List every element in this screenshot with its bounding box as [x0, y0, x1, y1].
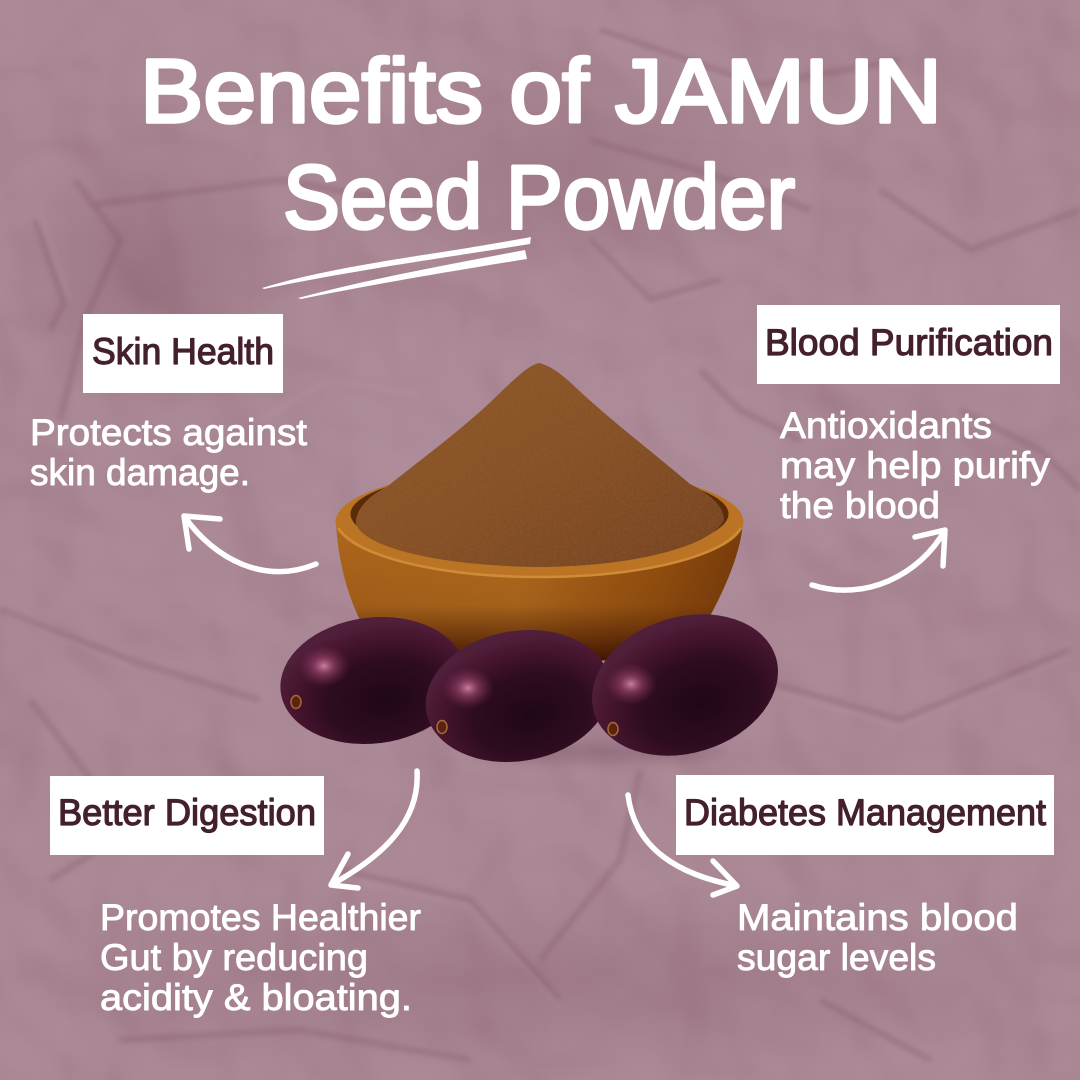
- fruit shadow: [470, 742, 730, 762]
- text: skin health description: Protects against: [30, 412, 308, 453]
- panel: skin health: [30, 314, 316, 572]
- label: blood purification: Blood Purification: [765, 322, 1053, 363]
- label: skin health: Skin Health: [92, 331, 274, 372]
- wooden bowl: [336, 467, 744, 662]
- text: blood purification description: [780, 405, 1051, 526]
- arrow: to diabetes management: [628, 795, 737, 895]
- powder mound: [356, 363, 724, 567]
- text: blood purification description: Antioxidants: [780, 405, 992, 446]
- jamun fruit right: [574, 592, 796, 778]
- label: better digestion: [50, 776, 324, 855]
- panel: better digestion: [50, 771, 421, 1018]
- text: better digestion description: [100, 897, 421, 1018]
- jamun fruit middle: [415, 616, 621, 776]
- text: blood purification description: the blood: [780, 485, 940, 526]
- label: diabetes management: [676, 775, 1054, 855]
- title: Benefits of JAMUN: [140, 42, 942, 142]
- panel: blood purification: [757, 305, 1060, 590]
- label: blood purification: [757, 305, 1060, 384]
- text: skin health description: skin damage.: [30, 452, 250, 493]
- text: skin health description: [30, 412, 308, 493]
- text: better digestion description: Promotes Healthier: [100, 897, 421, 938]
- text: better digestion description: Gut by reducing: [100, 937, 368, 978]
- text: diabetes management description: Maintains blood: [737, 897, 1018, 938]
- jamun fruit left: [273, 607, 473, 754]
- central illustration: bowl of powder and jamun fruits: [273, 363, 796, 778]
- title: Seed Powder: [283, 148, 795, 248]
- title: [140, 42, 942, 248]
- arrow: to skin health: [184, 516, 316, 572]
- arrow: to blood purification: [812, 530, 945, 590]
- label: skin health: [83, 314, 283, 393]
- text: better digestion description: acidity & bloating.: [100, 977, 412, 1018]
- arrow: to better digestion: [331, 771, 417, 888]
- label: better digestion: Better Digestion: [58, 792, 316, 833]
- panel: diabetes management: [628, 775, 1054, 978]
- text: blood purification description: may help purify: [780, 445, 1051, 486]
- label: diabetes management: Diabetes Management: [684, 792, 1047, 833]
- title underline scribble: [262, 237, 531, 299]
- text: diabetes management description: [737, 897, 1018, 978]
- text: diabetes management description: sugar levels: [737, 937, 936, 978]
